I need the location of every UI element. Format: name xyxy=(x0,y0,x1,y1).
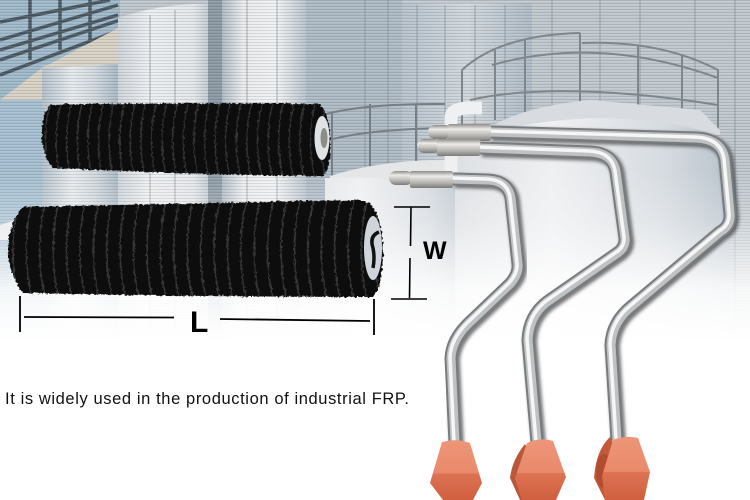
left platform xyxy=(0,205,62,240)
dimension W xyxy=(391,207,447,299)
white fade over lower background xyxy=(0,170,750,342)
medium handle collar and tip xyxy=(417,139,480,156)
tower xyxy=(222,0,306,340)
background photo: industrial silos and tanks xyxy=(0,0,750,340)
horizontal cladding stripes xyxy=(0,0,750,340)
dark ladder column xyxy=(208,0,222,340)
large handle grip xyxy=(594,437,650,500)
small brush roller xyxy=(42,103,330,176)
small brush end face xyxy=(314,116,330,160)
right tank xyxy=(455,118,730,340)
right silo xyxy=(402,3,532,340)
caption: It is widely used in the production of industrial FRP. xyxy=(5,390,409,408)
base wall xyxy=(0,0,750,340)
medium handle grip xyxy=(510,439,566,500)
right tank railing xyxy=(462,33,718,135)
large brush end face xyxy=(364,216,382,280)
handle: medium xyxy=(417,139,627,500)
label W: W xyxy=(423,237,447,265)
handle: small xyxy=(389,171,520,500)
sky and truss xyxy=(0,0,120,100)
silo 1 xyxy=(42,65,118,335)
label L: L xyxy=(190,306,208,339)
small handle grip xyxy=(430,440,482,500)
dimension L xyxy=(20,296,374,339)
mid gray silo xyxy=(306,0,402,340)
small handle collar and tip xyxy=(389,171,453,188)
left tank deck xyxy=(330,160,445,178)
large brush roller xyxy=(8,200,383,297)
handle: large xyxy=(428,124,732,500)
left tank railing xyxy=(306,104,445,176)
left blue silo xyxy=(0,98,45,338)
silo 2 xyxy=(118,4,218,340)
vertical seams xyxy=(150,0,735,340)
right tank deck xyxy=(480,100,720,135)
silo roofs xyxy=(0,28,118,100)
pipe xyxy=(451,108,482,185)
large handle collar and tip xyxy=(428,124,491,141)
left tank xyxy=(299,178,470,340)
